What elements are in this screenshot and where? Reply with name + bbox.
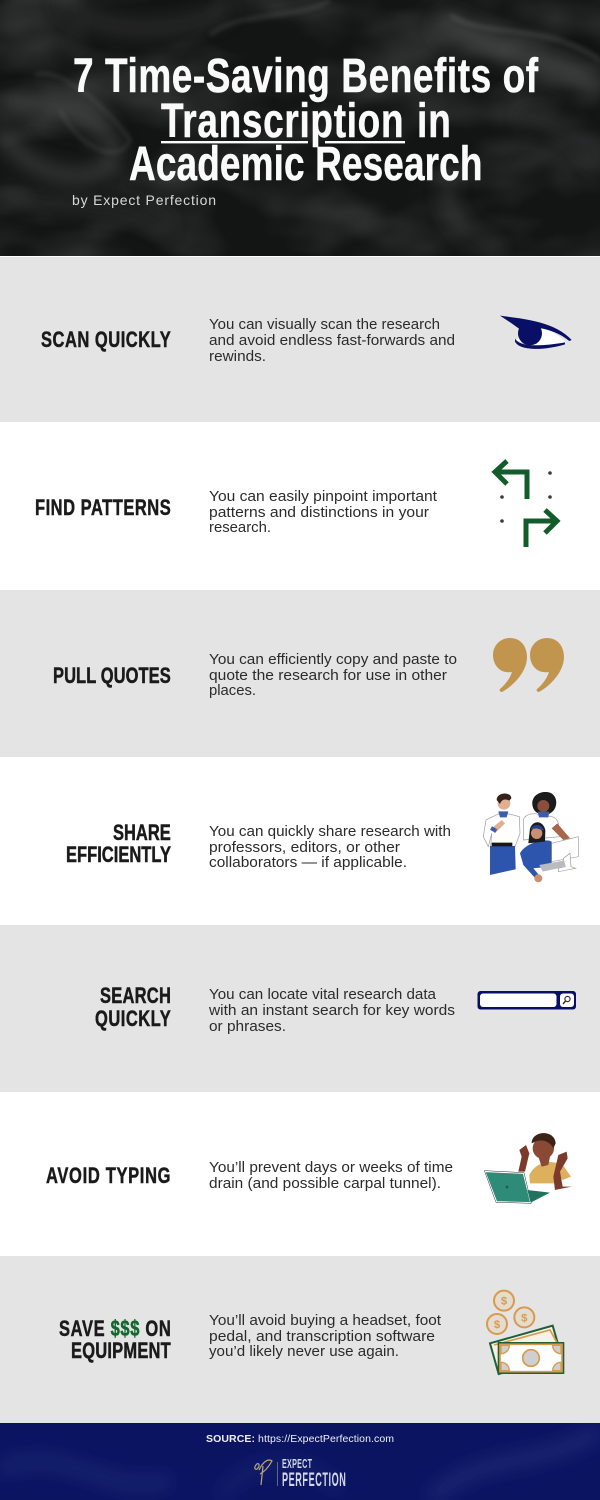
- text: share efficiently: collaborators — if applicable.: [209, 855, 407, 871]
- icon: coins and banknotes: $: [501, 1296, 508, 1308]
- heading: share efficiently: SHARE: [113, 821, 171, 846]
- icon: quotation marks: [493, 638, 564, 692]
- text: avoid typing: [209, 1160, 453, 1192]
- header panel: [0, 0, 600, 256]
- text: search quickly: You can locate vital research data: [209, 987, 437, 1003]
- icon: coins and banknotes: $: [494, 1319, 501, 1331]
- heading: search quickly: QUICKLY: [95, 1007, 171, 1032]
- text: share efficiently: [209, 824, 451, 871]
- logo: Expect Perfection: [255, 1458, 346, 1491]
- text: scan quickly: rewinds.: [209, 349, 266, 365]
- panel: avoid typing: [0, 1092, 600, 1256]
- panel: save on equipment: [0, 1256, 600, 1423]
- byline: by Expect Perfection: [72, 192, 216, 208]
- text: save on equipment: [209, 1313, 441, 1360]
- text: scan quickly: You can visually scan the research: [209, 317, 440, 333]
- icon: eye: [500, 316, 572, 349]
- text: find patterns: [209, 489, 437, 536]
- text: search quickly: or phrases.: [209, 1019, 286, 1035]
- heading: save on equipment: EQUIPMENT: [71, 1339, 171, 1364]
- text: find patterns: You can easily pinpoint important: [209, 489, 437, 505]
- heading: avoid typing: AVOID TYPING: [46, 1164, 170, 1189]
- heading: share efficiently: EFFICIENTLY: [66, 843, 171, 868]
- text: pull quotes: You can efficiently copy and paste to: [209, 652, 457, 668]
- icon: three colleagues at a computer: [483, 792, 578, 882]
- text: save on equipment: pedal, and transcription software: [209, 1329, 435, 1345]
- panel: share efficiently: [0, 757, 600, 925]
- panel: scan quickly: [0, 257, 600, 422]
- text: pull quotes: places.: [209, 683, 256, 699]
- source line: SOURCE: https://ExpectPerfection.com: [206, 1433, 394, 1445]
- text: avoid typing: You’ll prevent days or weeks of time: [209, 1160, 453, 1176]
- icon: search bar: [478, 991, 576, 1010]
- text: avoid typing: drain (and possible carpal tunnel).: [209, 1176, 441, 1192]
- panel: search quickly: [0, 925, 600, 1092]
- heading: share efficiently: [66, 821, 171, 868]
- text: find patterns: patterns and distinctions in your: [209, 505, 429, 521]
- title: Academic Research: [129, 137, 482, 191]
- text: search quickly: [208, 987, 455, 1035]
- footer panel: [0, 1423, 600, 1500]
- panel: find patterns: [0, 422, 600, 590]
- text: save on equipment: you’d likely never use again.: [209, 1344, 399, 1360]
- logo: Expect Perfection: PERFECTION: [282, 1471, 346, 1491]
- heading: find patterns: FIND PATTERNS: [35, 496, 171, 521]
- heading: save on equipment: [59, 1317, 171, 1364]
- icon: coins and banknotes: $: [521, 1312, 528, 1324]
- icon: coins and banknotes: [487, 1291, 564, 1374]
- heading: scan quickly: SCAN QUICKLY: [41, 328, 171, 353]
- text: share efficiently: You can quickly share research with: [209, 824, 451, 840]
- text: scan quickly: and avoid endless fast-forwards and: [209, 333, 455, 349]
- icon: crossing arrows: [495, 461, 557, 547]
- text: save on equipment: You’ll avoid buying a headset, foot: [209, 1313, 441, 1329]
- title: [73, 49, 539, 191]
- logo: Expect Perfection: EXPECT: [282, 1458, 312, 1472]
- heading: pull quotes: PULL QUOTES: [53, 664, 171, 689]
- text: scan quickly: [209, 317, 455, 365]
- text: search quickly: with an instant search for key words: [208, 1003, 455, 1019]
- panel: pull quotes: [0, 590, 600, 757]
- text: share efficiently: professors, editors, or other: [209, 840, 400, 856]
- text: find patterns: research.: [209, 520, 271, 536]
- icon: person at laptop: [484, 1133, 572, 1203]
- title: in: [417, 94, 451, 148]
- heading: search quickly: [95, 984, 171, 1032]
- heading: save on equipment: SAVE $$$ ON: [59, 1317, 171, 1342]
- text: pull quotes: [209, 652, 457, 699]
- title: 7 Time-Saving Benefits of: [73, 49, 539, 103]
- title: Transcription: [161, 94, 404, 148]
- text: pull quotes: quote the research for use in other: [209, 668, 447, 684]
- heading: search quickly: SEARCH: [100, 984, 171, 1009]
